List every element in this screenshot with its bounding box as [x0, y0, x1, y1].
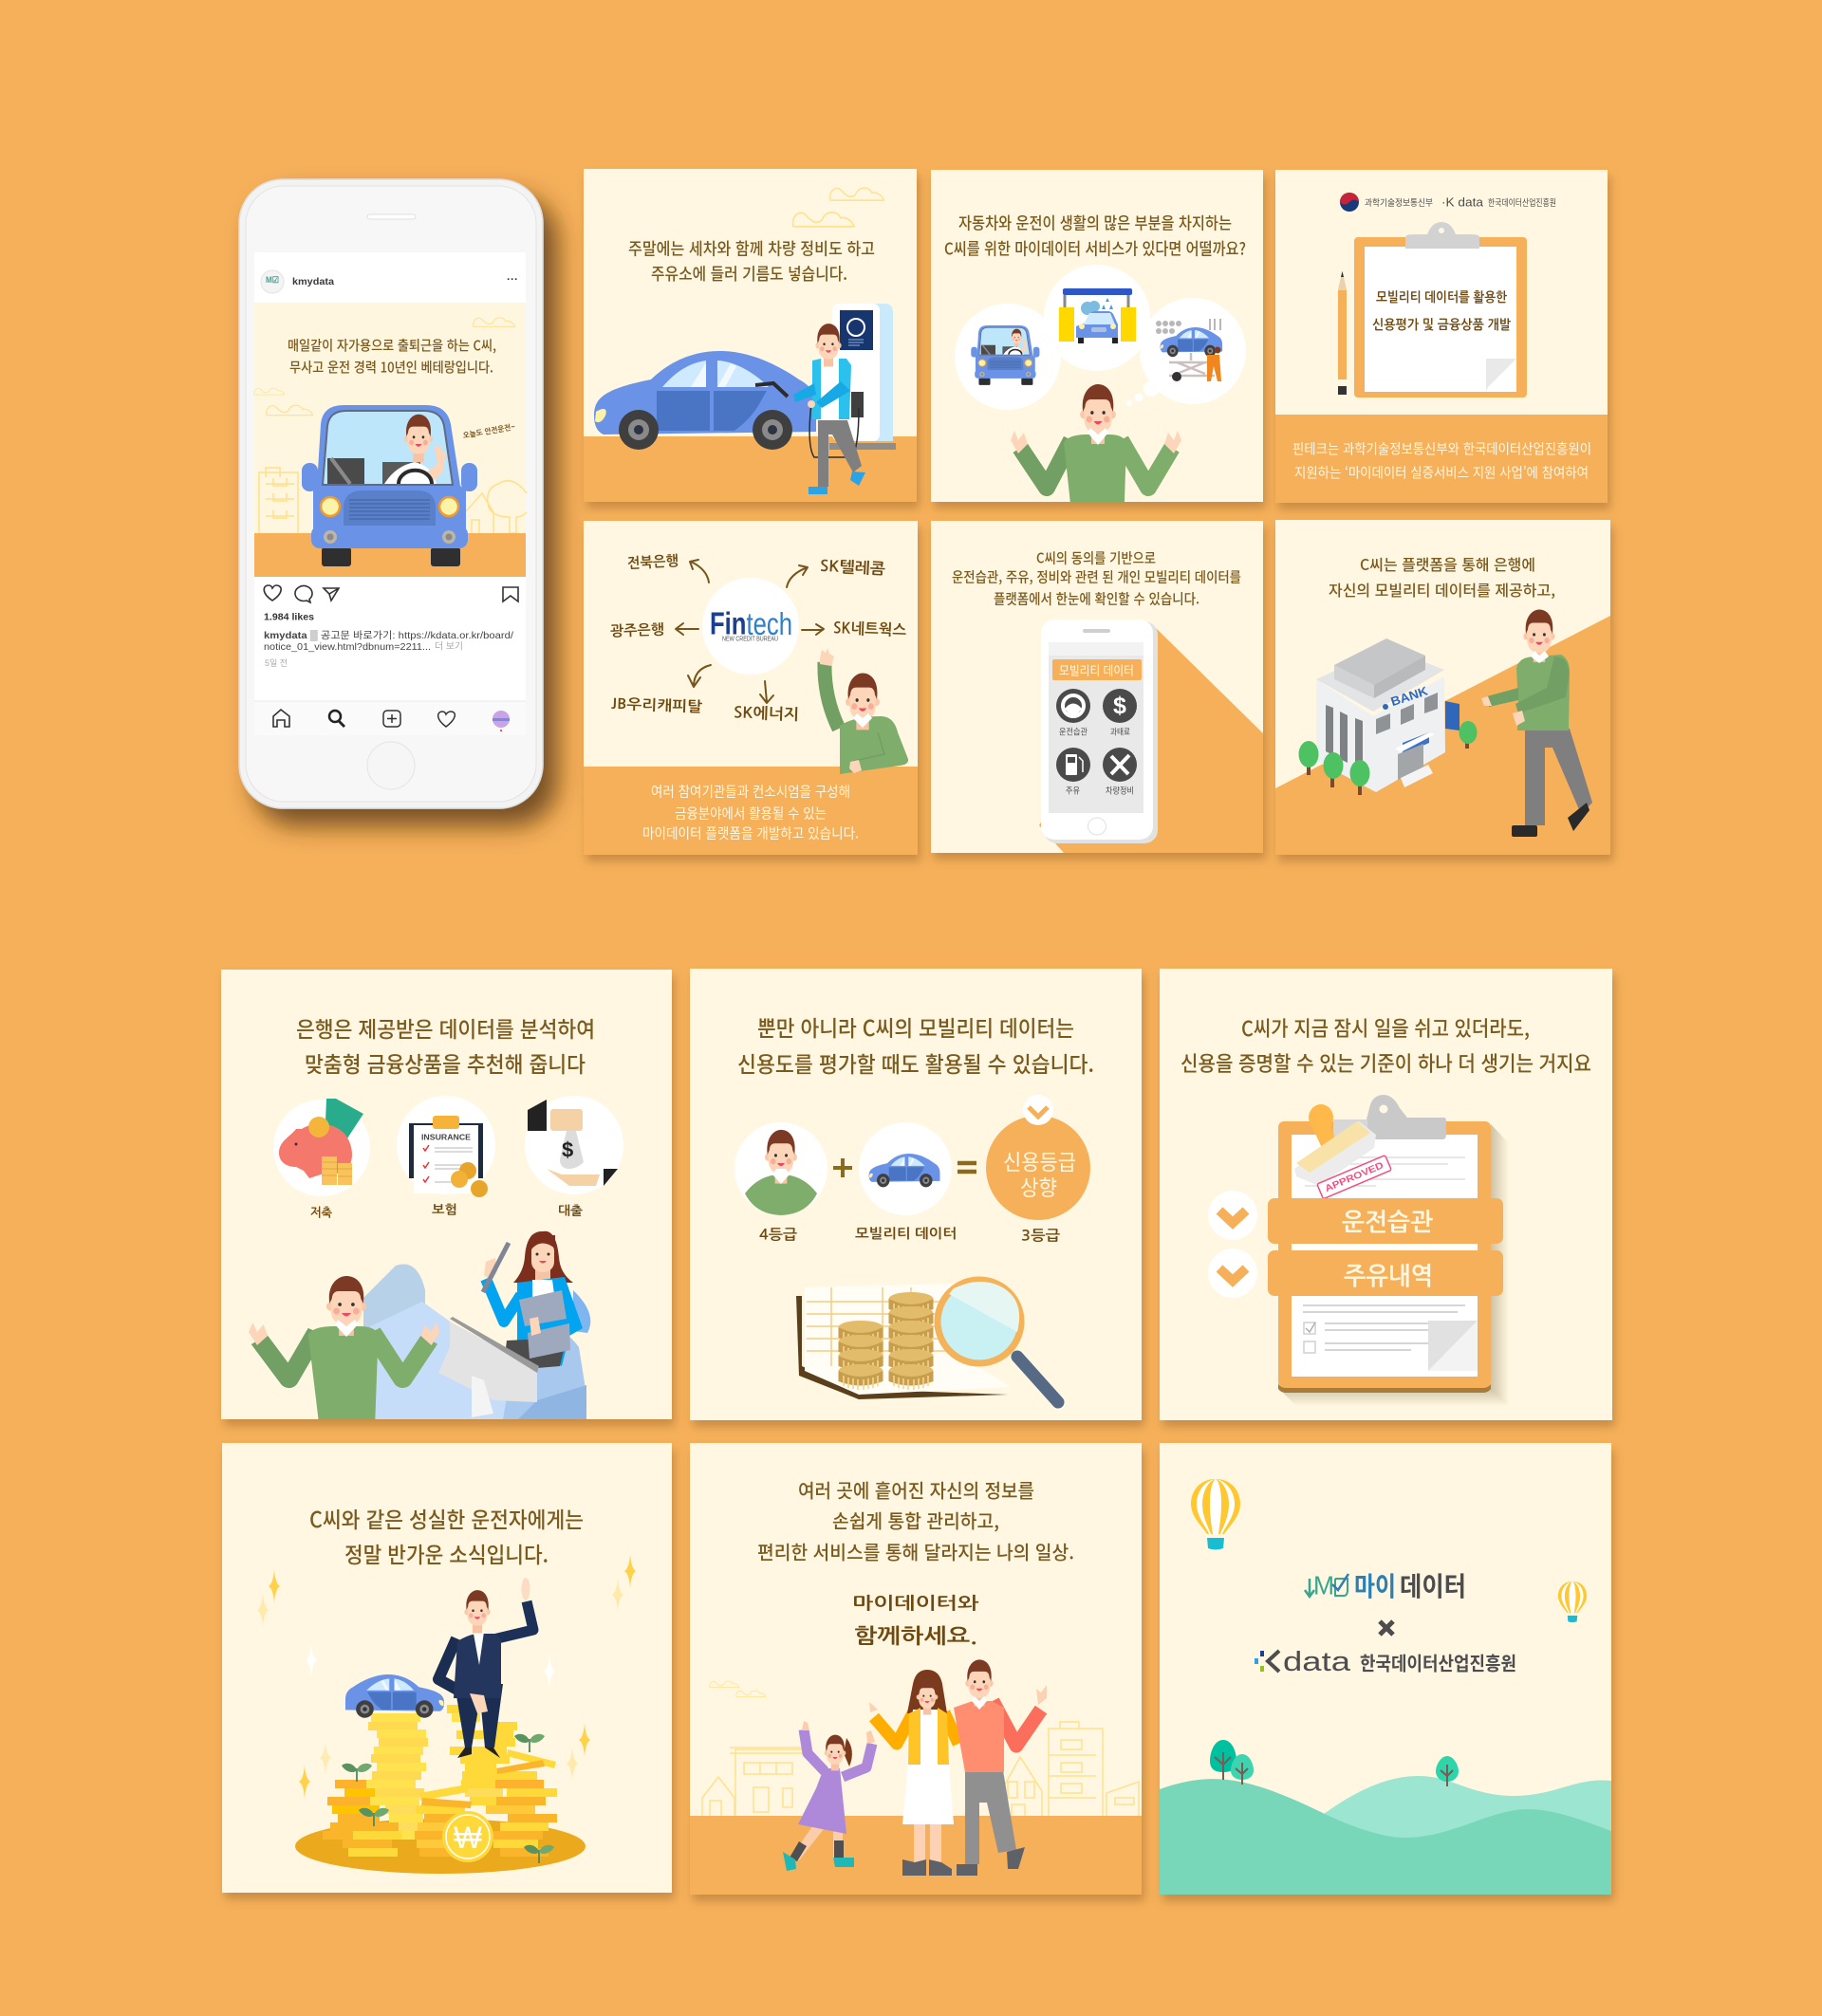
check items: 주유내역 [1344, 1264, 1433, 1288]
icon: insurance [397, 1096, 495, 1197]
man in suit [438, 1578, 533, 1758]
likes and caption text: 5일 전 [265, 658, 288, 668]
grade labels: 3등급 [1021, 1228, 1060, 1243]
diagonal orange shape [1275, 616, 1610, 855]
panel: bank [1275, 520, 1610, 855]
sparkles [257, 1554, 636, 1799]
gold base [295, 1819, 586, 1874]
heading [309, 1502, 584, 1569]
handwritten line: 함께하세요. [854, 1625, 977, 1647]
equals [957, 1163, 976, 1172]
won coin [442, 1811, 493, 1862]
heading [628, 237, 875, 286]
thought bubbles [955, 265, 1246, 410]
kdata logo: 한국데이터산업진흥원 [1360, 1649, 1516, 1675]
band text [642, 782, 859, 842]
handwritten line [852, 1594, 978, 1647]
band text: 지원하는 ‘마이데이터 실증서비스 지원 사업’에 참여하여 [1294, 463, 1589, 482]
fintech circle: NEW CREDIT BUREAU [722, 636, 778, 643]
phone mockup with instagram post [239, 179, 543, 808]
icon: insurance: INSURANCE [421, 1133, 472, 1142]
heading [757, 1476, 1074, 1565]
fintech circle [702, 578, 799, 675]
likes and caption text: 1.984 likes [264, 613, 314, 622]
sponsor logos: 과학기술정보통신부 [1365, 195, 1433, 209]
car circle [859, 1122, 952, 1215]
car service icon [1156, 319, 1222, 381]
heading: 은행은 제공받은 데이터를 분석하여 [296, 1011, 595, 1044]
panel: credit score [690, 969, 1142, 1420]
grade up circle: 상향 [1020, 1170, 1057, 1202]
panel background [221, 970, 672, 1419]
post caption: 매일같이 자가용으로 출퇴근을 하는 C씨, [288, 336, 496, 355]
product labels: 보험 [432, 1203, 457, 1216]
heading [737, 1010, 1094, 1079]
heading: 자신의 모빌리티 데이터를 제공하고, [1329, 578, 1555, 601]
heading [1181, 1012, 1591, 1078]
clouds [793, 188, 883, 227]
dad [954, 1659, 1047, 1876]
coin stacks [323, 1705, 557, 1857]
grade labels: 4등급 [759, 1228, 797, 1243]
heading: 주유소에 들러 기름도 넣습니다. [651, 262, 847, 286]
my data logo: 마이 [1354, 1566, 1396, 1604]
approved stamp: APPROVED [1324, 1160, 1385, 1194]
check items [1208, 1191, 1503, 1298]
monitor [438, 1317, 539, 1417]
app header [1052, 659, 1142, 680]
panel: government project [1275, 170, 1608, 503]
woman with folder [483, 1231, 583, 1371]
heading: 손쉽게 통합 관리하고, [832, 1507, 999, 1533]
clipboard text: 모빌리티 데이터를 활용한 [1376, 290, 1508, 305]
approved stamp [1294, 1104, 1391, 1199]
plus [833, 1158, 852, 1177]
won coin: ₩ [454, 1821, 482, 1855]
partner labels: SK네트웍스 [833, 620, 906, 638]
clipboard text: 신용평가 및 금융상품 개발 [1372, 318, 1512, 332]
grade up circle: 신용등급 [1003, 1144, 1076, 1176]
orange band [584, 767, 918, 855]
bottom nav [254, 701, 526, 735]
arrows [676, 560, 824, 703]
car wash icon [1059, 288, 1136, 343]
product labels: 대출 [558, 1205, 583, 1216]
clipboard [1354, 222, 1527, 398]
town outline [702, 1722, 1139, 1816]
pencil [1338, 271, 1347, 395]
panel background [1160, 1443, 1611, 1895]
my data logo: 데이터 [1400, 1566, 1466, 1604]
panel background [931, 170, 1263, 502]
panel background [222, 1443, 672, 1893]
panel: family [690, 1443, 1142, 1895]
post actions [264, 585, 518, 602]
panel: gas station [584, 169, 917, 502]
clipboard with shadow [1278, 1095, 1509, 1406]
band text: 여러 참여기관들과 컨소시엄을 구성해 [651, 782, 850, 801]
app icons: 주유 [1066, 784, 1080, 797]
partner labels: JB우리캐피탈 [611, 696, 702, 714]
man with arms up [249, 1276, 440, 1422]
grade up circle [986, 1095, 1090, 1220]
partner labels [610, 553, 906, 723]
panel background [1275, 170, 1608, 503]
person refuelling [755, 324, 865, 494]
office desk scene [363, 1264, 590, 1419]
woman [869, 1670, 958, 1876]
clipboard text [1372, 290, 1512, 332]
heading: 정말 반가운 소식입니다. [344, 1537, 548, 1569]
hot air balloons [1191, 1479, 1587, 1622]
trees [1298, 721, 1477, 795]
post header: ··· [507, 274, 518, 286]
grade labels: 모빌리티 데이터 [855, 1227, 957, 1241]
partner labels: SK에너지 [734, 704, 799, 723]
product labels: 저축 [310, 1207, 332, 1218]
likes and caption text: kmydata ▒ 공고문 바로가기: https://kdata.or.kr/board/ [264, 630, 513, 641]
band text: 핀테크는 과학기술정보통신부와 한국데이터산업진흥원이 [1292, 438, 1591, 459]
sprouts [342, 1734, 554, 1863]
bank building [1316, 638, 1459, 792]
partner labels: 광주은행 [610, 621, 664, 638]
post header [261, 270, 518, 293]
heading: 주말에는 세차와 함께 차량 정비도 하고 [628, 237, 875, 260]
clouds [710, 1681, 766, 1697]
heading: 맞춤형 금융상품을 추천해 줍니다 [305, 1046, 586, 1079]
heading: 플랫폼에서 한눈에 확인할 수 있습니다. [994, 588, 1199, 609]
panel background [1275, 520, 1610, 855]
speech scribble: 오늘도 안전운전~ [462, 422, 516, 440]
bank building: BANK [1389, 683, 1430, 709]
panel: my data service idea [931, 170, 1263, 530]
girl [783, 1721, 875, 1871]
likes and caption text: 더 보기 [435, 641, 463, 653]
heading: 신용을 증명할 수 있는 기준이 하나 더 생기는 거지요 [1181, 1047, 1591, 1078]
app screen [254, 252, 526, 735]
panel background [1160, 969, 1612, 1420]
heading: 자동차와 운전이 생활의 많은 부분을 차지하는 [958, 211, 1232, 235]
fintech circle: Fintech [710, 605, 792, 641]
trees [1210, 1740, 1459, 1786]
panel: mobility platform [931, 521, 1263, 853]
band text [1292, 438, 1591, 482]
smartphone [1041, 620, 1158, 843]
hills [1160, 1776, 1611, 1895]
waving man [820, 648, 908, 774]
likes and caption text: notice_01_view.html?dbnum=2211... [264, 641, 431, 653]
icon: loan [525, 1096, 623, 1194]
icon: loan: $ [562, 1138, 573, 1161]
blue car [594, 351, 816, 450]
diagonal orange shape [1039, 628, 1263, 853]
heading: C씨는 플랫폼을 통해 은행에 [1360, 552, 1535, 575]
product labels [310, 1203, 583, 1218]
panel: good news for drivers [222, 1443, 672, 1893]
icon: savings piggy bank [273, 1099, 370, 1196]
heading: 운전습관, 주유, 정비와 관련 된 개인 모빌리티 데이터를 [952, 567, 1241, 586]
car on coins [345, 1674, 444, 1718]
phone body [239, 179, 543, 808]
bottom band [1275, 415, 1608, 503]
kdata logo: data [1283, 1647, 1351, 1677]
heading: 신용도를 평가할 때도 활용될 수 있습니다. [737, 1046, 1094, 1079]
man circle [734, 1122, 827, 1215]
app icons: 운전습관 [1059, 725, 1088, 738]
app icons: 과태료 [1110, 725, 1130, 738]
heading [1329, 552, 1555, 601]
band text: 금융분야에서 활용될 수 있는 [675, 803, 827, 823]
panel background [584, 169, 917, 502]
sponsor logos: 한국데이터산업진흥원 [1488, 195, 1556, 209]
smartphone: 모빌리티 데이터 [1059, 660, 1134, 679]
heading [944, 211, 1246, 260]
band text: 마이데이터 플랫폼을 개발하고 있습니다. [642, 823, 859, 842]
ledger, coins and magnifier [796, 1280, 1058, 1402]
partner labels: 전북은행 [627, 553, 679, 571]
app icons: 차량정비 [1106, 784, 1134, 797]
heading [296, 1011, 595, 1079]
handwritten line: 마이데이터와 [852, 1594, 978, 1612]
heading: C씨가 지금 잠시 일을 쉬고 있더라도, [1241, 1012, 1530, 1043]
ground [690, 1816, 1142, 1895]
grade labels [759, 1227, 1060, 1243]
sponsor logos [1340, 193, 1556, 212]
post image: 무사고 운전 경력 10년인 베테랑입니다. [289, 357, 493, 378]
app icons [1056, 689, 1137, 797]
likes and caption text [264, 613, 513, 668]
post header: M☑ [266, 275, 279, 285]
heading: C씨와 같은 성실한 운전자에게는 [309, 1502, 584, 1534]
truck icon [971, 325, 1039, 385]
panel background [690, 1443, 1142, 1895]
home button [367, 742, 415, 789]
partner labels: SK텔레콤 [820, 558, 885, 577]
fuel pump [829, 304, 896, 450]
panel background [931, 521, 1263, 853]
heading: 여러 곳에 흩어진 자신의 정보를 [798, 1476, 1034, 1503]
ground band [584, 436, 917, 502]
my data logo: M [1313, 1571, 1334, 1600]
check items: 운전습관 [1342, 1210, 1434, 1234]
panel: credit proof checklist [1160, 969, 1612, 1420]
panel background [690, 969, 1142, 1420]
my data logo [1305, 1566, 1466, 1604]
background buildings [259, 468, 527, 533]
times sign [1380, 1621, 1393, 1635]
panel: logos closing [1160, 1443, 1611, 1895]
equation [734, 1095, 1090, 1220]
heading: 뿐만 아니라 C씨의 모빌리티 데이터는 [757, 1010, 1074, 1043]
panel background [584, 521, 918, 855]
heading: C씨를 위한 마이데이터 서비스가 있다면 어떨까요? [944, 237, 1246, 260]
kdata logo [1255, 1647, 1516, 1677]
heading [952, 548, 1241, 609]
panel: recommended financial products [221, 970, 672, 1422]
panel: fintech consortium [584, 521, 918, 855]
heading: 편리한 서비스를 통해 달라지는 나의 일상. [757, 1537, 1074, 1565]
post image [254, 303, 527, 577]
sponsor logos: ·K data [1441, 195, 1484, 209]
heading: C씨의 동의를 기반으로 [1036, 548, 1156, 567]
blue truck with driver [302, 405, 477, 566]
man shrugging [1011, 384, 1181, 502]
walking man [1481, 609, 1592, 837]
app icons: $ [1113, 693, 1126, 719]
post header: kmydata [292, 276, 334, 287]
